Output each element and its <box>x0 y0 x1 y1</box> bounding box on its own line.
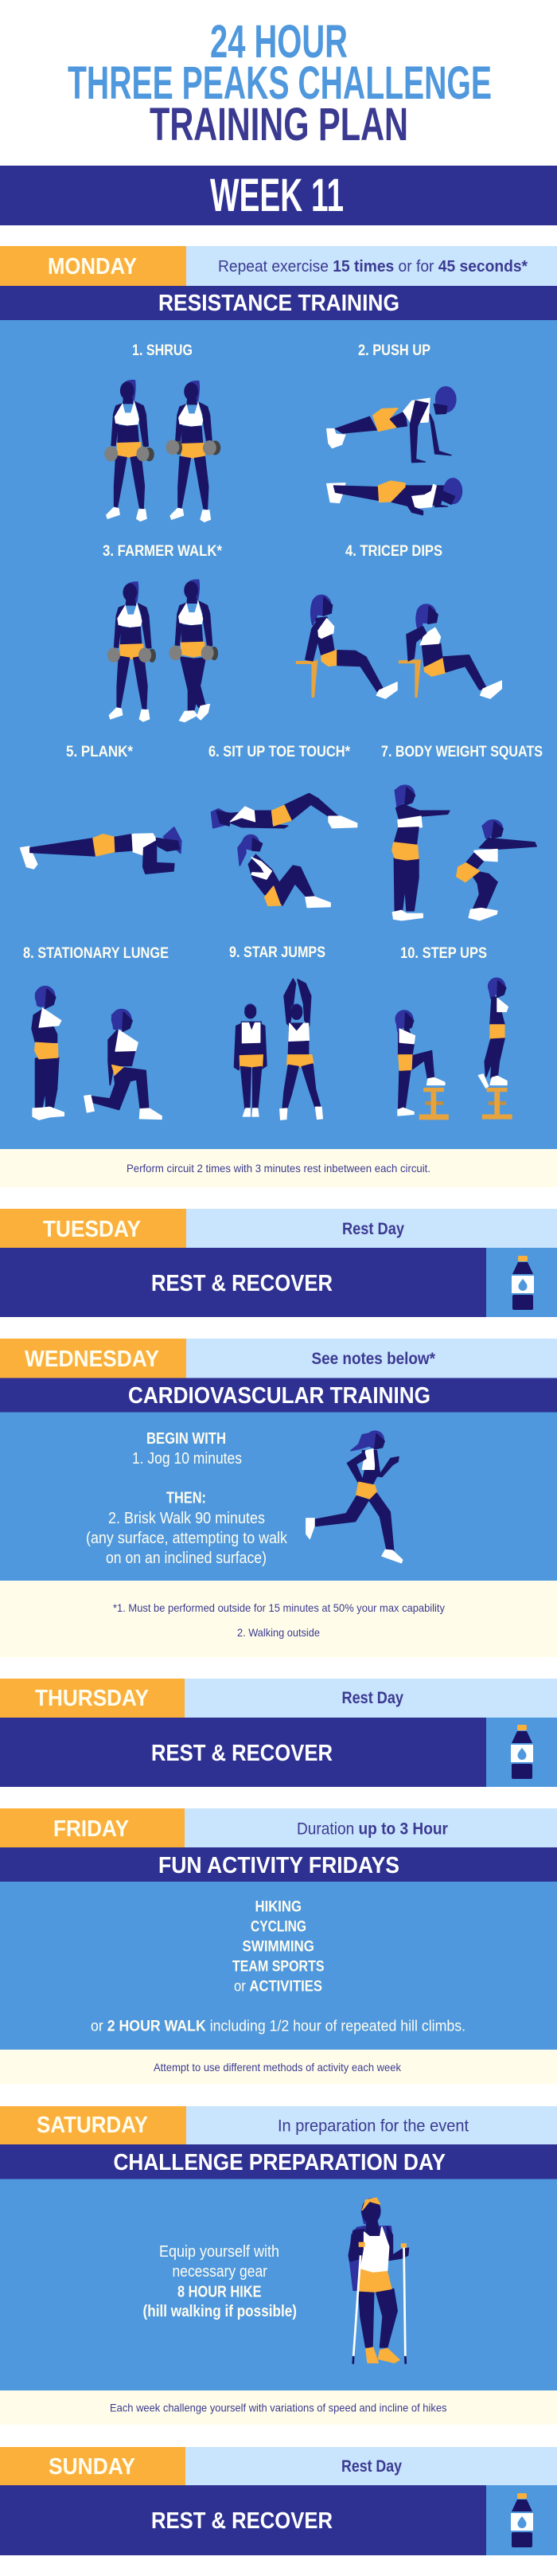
panel: monday <box>0 246 557 1187</box>
panel: saturday: CHALLENGE PREPARATION DAY <box>113 2150 446 2175</box>
panel: wednesday: CARDIOVASCULAR TRAINING <box>128 1383 430 1409</box>
title: TRAINING PLAN <box>150 99 408 150</box>
monday day header <box>0 246 557 286</box>
exercise labels: 2. PUSH UP <box>358 342 430 359</box>
circuit note: Perform circuit 2 times with 3 minutes rest inbetween each circuit. <box>127 1162 430 1175</box>
panel: sunday: REST & RECOVER <box>151 2508 333 2534</box>
figure: star jumps <box>235 979 322 1120</box>
friday note <box>0 2050 557 2085</box>
exercise labels <box>23 342 543 962</box>
activity list: or 2 HOUR WALK including 1/2 hour of repeated hill climbs. <box>91 2018 465 2035</box>
figure: farmer walk <box>107 580 218 722</box>
cardio instructions <box>86 1430 288 1567</box>
figure: body weight squats <box>392 785 536 921</box>
activity list <box>91 1898 465 2035</box>
cardio instructions: BEGIN WITH <box>146 1430 226 1448</box>
panel: friday <box>0 1808 557 2085</box>
figure: sit up toe touch <box>212 793 357 908</box>
cardio notes: 2. Walking outside <box>237 1626 320 1639</box>
panel: tuesday: REST & RECOVER <box>151 1271 333 1296</box>
figure: tricep dips <box>296 595 501 698</box>
cardio instructions: THEN: <box>166 1489 206 1507</box>
figure: runner <box>306 1431 403 1563</box>
figure: plank <box>20 827 181 874</box>
panel: wednesday <box>0 1339 557 1657</box>
panel: friday: FUN ACTIVITY FRIDAYS <box>158 1853 399 1878</box>
panel: sunday: SUNDAY <box>49 2454 135 2480</box>
figure: stationary lunge <box>32 987 162 1120</box>
panel: friday: FRIDAY <box>53 1816 129 1842</box>
resistance training heading: RESISTANCE TRAINING <box>158 291 399 316</box>
panel: thursday: REST & RECOVER <box>151 1741 333 1766</box>
panel: thursday: THURSDAY <box>35 1686 149 1711</box>
icon: water bottle <box>511 2493 533 2547</box>
exercise figures row 3 and 4 <box>20 785 536 1120</box>
figure: shrug <box>104 380 220 522</box>
cardio instructions: 1. Jog 10 minutes <box>132 1450 242 1468</box>
exercise labels: 8. STATIONARY LUNGE <box>23 945 169 962</box>
icon: water bottle <box>512 1256 534 1310</box>
activity list: SWIMMING <box>242 1938 314 1956</box>
panel: thursday <box>0 1679 557 1787</box>
panel: tuesday <box>0 1209 557 1317</box>
panel: sunday: Rest Day <box>341 2457 402 2476</box>
cardio instructions: 2. Brisk Walk 90 minutes <box>108 1510 265 1527</box>
figure: push up <box>327 387 462 515</box>
activity list: TEAM SPORTS <box>232 1957 325 1975</box>
cardio notes: *1. Must be performed outside for 15 minutes at 50% your max capability <box>113 1601 445 1614</box>
exercise figures row 1 and 2 <box>104 380 501 722</box>
monday day header: Repeat exercise 15 times or for 45 seconds* <box>218 258 528 276</box>
friday note: Attempt to use different methods of activity each week <box>154 2061 402 2074</box>
activity list: CYCLING <box>251 1917 306 1935</box>
activity list: HIKING <box>255 1898 302 1916</box>
exercise labels: 3. FARMER WALK* <box>103 543 223 560</box>
icon: water bottle <box>511 1725 533 1779</box>
panel: tuesday: Rest Day <box>342 1220 404 1238</box>
panel: sunday <box>0 2447 557 2555</box>
exercise panel background <box>0 320 557 1149</box>
monday day header: MONDAY <box>48 254 137 279</box>
preparation instructions <box>143 2243 297 2320</box>
exercise labels: 1. SHRUG <box>132 342 193 359</box>
exercise labels: 4. TRICEP DIPS <box>345 543 442 560</box>
resistance training heading <box>0 286 557 320</box>
panel: saturday: In preparation for the event <box>278 2117 469 2136</box>
exercise labels: 10. STEP UPS <box>400 945 487 962</box>
figure: hiker <box>349 2198 408 2364</box>
preparation instructions: (hill walking if possible) <box>143 2303 297 2320</box>
cardio notes <box>0 1581 557 1657</box>
circuit note <box>0 1149 557 1187</box>
activity list: or ACTIVITIES <box>234 1978 322 1996</box>
saturday note <box>0 2390 557 2425</box>
title: 24 HOUR <box>210 16 348 68</box>
panel: saturday <box>0 2106 557 2425</box>
week banner <box>0 166 557 225</box>
preparation instructions: necessary gear <box>172 2263 267 2281</box>
figure: step ups <box>395 978 512 1120</box>
preparation instructions: Equip yourself with <box>159 2243 279 2261</box>
cardio instructions: on on an inclined surface) <box>106 1550 267 1567</box>
saturday note: Each week challenge yourself with variations of speed and incline of hikes <box>110 2402 447 2414</box>
exercise labels: 5. PLANK* <box>66 744 134 760</box>
week banner: WEEK 11 <box>210 170 344 221</box>
panel: thursday: Rest Day <box>342 1689 403 1707</box>
panel: friday: Duration up to 3 Hour <box>297 1820 448 1838</box>
panel: saturday: SATURDAY <box>37 2113 148 2138</box>
exercise labels: 9. STAR JUMPS <box>229 944 325 961</box>
exercise labels: 6. SIT UP TOE TOUCH* <box>208 744 351 760</box>
preparation instructions: 8 HOUR HIKE <box>177 2284 261 2301</box>
panel: tuesday: TUESDAY <box>43 1217 141 1242</box>
panel: wednesday: See notes below* <box>312 1350 436 1368</box>
cardio instructions: (any surface, attempting to walk <box>86 1530 288 1547</box>
title <box>68 16 492 150</box>
panel: wednesday: WEDNESDAY <box>25 1347 159 1372</box>
